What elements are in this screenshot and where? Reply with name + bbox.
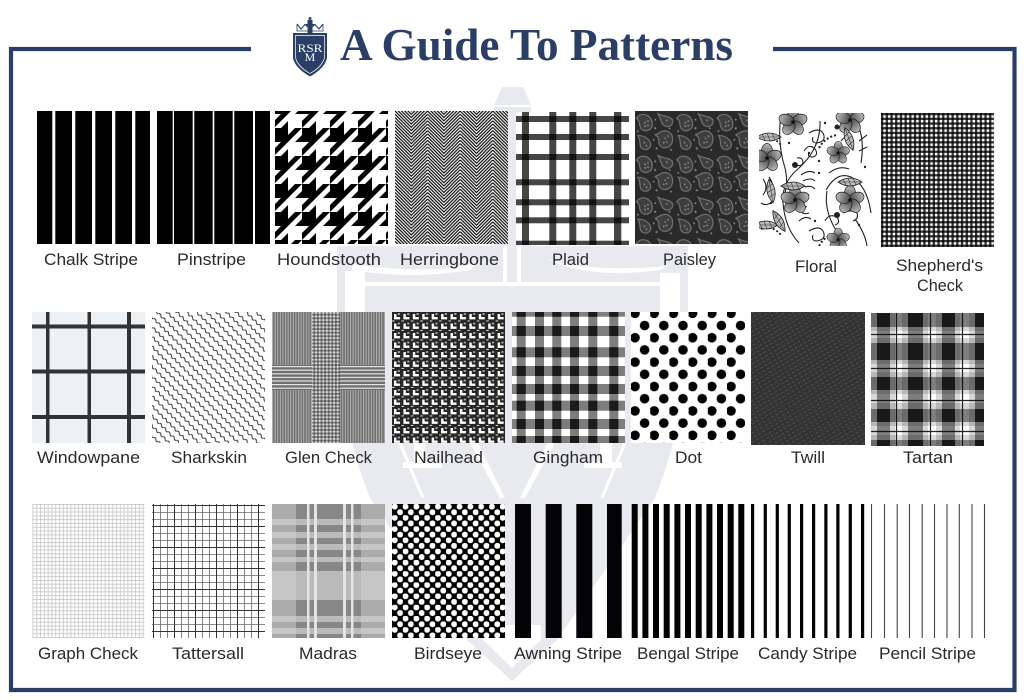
panel: Gingham: [512, 312, 625, 467]
panel: Bengal Stripe: [632, 504, 744, 663]
swatch: gingham: [512, 312, 625, 443]
swatch: sharkskin: [152, 312, 265, 443]
label: Sharkskin: [171, 448, 247, 467]
watermark: faint brand crest: [337, 87, 688, 681]
panel: Graph Check: [32, 504, 144, 663]
swatch: nailhead: [392, 312, 505, 443]
panel: Glen Check: [272, 312, 385, 467]
swatch: graph check: [32, 504, 144, 638]
panel: Sharkskin: [152, 312, 265, 467]
swatch: tartan: [871, 313, 984, 446]
icon: brand shield logo: [293, 17, 327, 76]
panel: Houndstooth: [275, 111, 388, 269]
label: Dot: [675, 448, 702, 467]
label: Pinstripe: [177, 250, 246, 269]
label: Bengal Stripe: [637, 644, 739, 663]
label: Floral: [795, 257, 837, 276]
swatch: tattersall: [152, 504, 265, 638]
panel: Windowpane: [32, 312, 145, 467]
panel: Birdseye: [392, 504, 505, 663]
panel: Chalk Stripe: [37, 111, 150, 269]
panel: Pinstripe: [157, 111, 270, 269]
swatch: madras: [272, 504, 385, 638]
label: Twill: [791, 448, 825, 467]
label: Candy Stripe: [758, 644, 857, 663]
swatch: birdseye: [392, 504, 505, 638]
label line two: Check: [917, 276, 963, 295]
panel: Nailhead: [392, 312, 505, 467]
label: Madras: [299, 644, 357, 663]
label: Birdseye: [414, 644, 482, 663]
label: Herringbone: [400, 250, 499, 269]
label: Houndstooth: [277, 250, 381, 269]
swatch: plaid: [516, 112, 629, 245]
label: Pencil Stripe: [879, 644, 976, 663]
panel: Candy Stripe: [751, 504, 864, 663]
label: Plaid: [552, 250, 589, 269]
swatch: pinstripe: [157, 111, 270, 244]
panel: Tattersall: [152, 504, 265, 663]
panel: Tartan: [871, 313, 984, 467]
swatch: bengal stripe: [632, 504, 744, 638]
swatch: windowpane: [32, 312, 145, 443]
icon: brand shield logo: M: [305, 50, 316, 64]
panel: Herringbone: [395, 111, 508, 269]
panel: Madras: [272, 504, 385, 663]
swatch: pencil stripe: [872, 504, 984, 638]
panel: Plaid: [516, 112, 629, 269]
label: Graph Check: [38, 644, 138, 663]
label: Windowpane: [37, 448, 140, 467]
swatch: paisley: [635, 111, 748, 244]
label: Chalk Stripe: [44, 250, 138, 269]
heading: [293, 17, 733, 76]
swatch: chalk stripe: [37, 111, 150, 244]
label: Shepherd's: [896, 256, 983, 275]
panel: Awning Stripe: [514, 504, 622, 663]
title: A Guide To Patterns: [340, 19, 733, 70]
swatch: candy stripe: [751, 504, 864, 638]
swatch: herringbone: [395, 111, 508, 244]
label: Gingham: [533, 448, 603, 467]
label: Tattersall: [172, 644, 244, 663]
label: Awning Stripe: [514, 644, 622, 663]
label: Glen Check: [285, 448, 372, 467]
panel: Pencil Stripe: [872, 504, 984, 663]
swatch: dot: [631, 312, 745, 443]
swatch: glen check: [272, 312, 385, 443]
label: Paisley: [663, 250, 716, 269]
label: Nailhead: [414, 448, 483, 467]
label: Tartan: [903, 448, 953, 467]
panel: Dot: [631, 312, 745, 467]
swatch: twill: [751, 312, 865, 445]
panel: Shepherd's Check: [881, 113, 994, 295]
icon: brand shield logo: RSR: [298, 41, 322, 55]
panel: Floral: [752, 106, 872, 276]
swatch: houndstooth: [275, 111, 388, 244]
swatch: awning stripe: [515, 504, 622, 638]
panel: Twill: [751, 312, 865, 467]
swatch: shepherd's check: [881, 113, 994, 247]
panel: Paisley: [635, 111, 748, 269]
swatch: floral: [759, 113, 872, 246]
